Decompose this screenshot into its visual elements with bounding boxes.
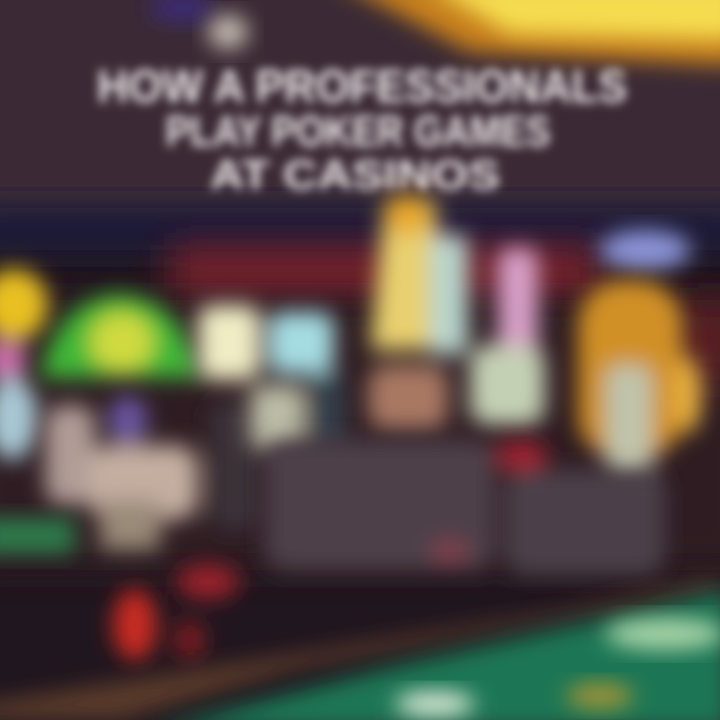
golden arch machine — [578, 280, 702, 480]
players at left table — [45, 396, 260, 550]
green umbrella lamp — [40, 294, 200, 378]
title: AT CASINOS — [210, 151, 500, 198]
light panels — [198, 305, 345, 450]
title: PLAY POKER GAMES — [166, 107, 550, 156]
table rail — [0, 578, 720, 720]
title — [97, 60, 627, 198]
crowd — [265, 440, 665, 575]
red chairs — [113, 564, 240, 661]
blue sign — [599, 230, 691, 270]
logo icon — [208, 15, 248, 49]
title: HOW A PROFESSIONALS — [97, 60, 627, 112]
left table — [0, 518, 75, 554]
poker table — [150, 590, 720, 720]
ceiling light — [150, 0, 720, 66]
left umbrella lamp — [0, 269, 48, 460]
tall light column — [368, 195, 545, 430]
